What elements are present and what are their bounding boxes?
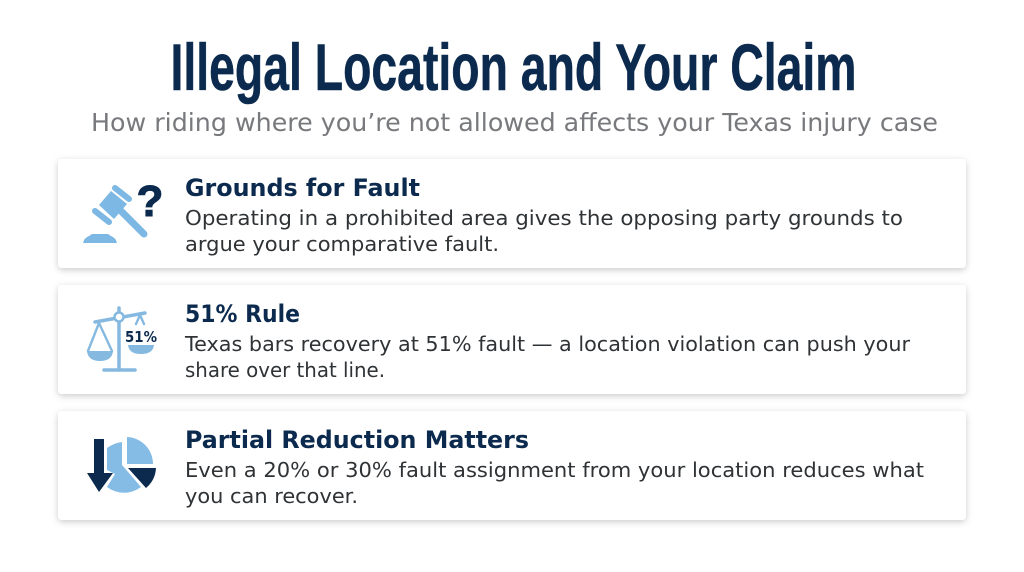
heading: Partial Reduction Matters	[185, 426, 529, 454]
subtitle: How riding where you’re not allowed affects your Texas injury case	[91, 108, 938, 137]
heading: 51% Rule	[185, 300, 300, 328]
body text	[185, 458, 924, 508]
body text	[184, 332, 911, 382]
icon: scales with 51%	[87, 308, 157, 370]
icon: gavel with question mark	[83, 177, 163, 243]
body text: argue your comparative fault.	[185, 232, 499, 256]
heading: Grounds for Fault	[185, 174, 420, 202]
body text: share over that line.	[185, 358, 385, 382]
panel: grounds for fault	[58, 159, 966, 268]
icon: down arrow and pie chart	[87, 437, 156, 493]
body text: Texas bars recovery at 51% fault — a location violation can push your	[184, 332, 911, 356]
panel: partial reduction matters	[58, 411, 966, 520]
body text: you can recover.	[185, 484, 358, 508]
question mark: ?	[136, 177, 163, 226]
body text	[185, 206, 903, 256]
body text: Even a 20% or 30% fault assignment from your location reduces what	[185, 458, 924, 482]
body text: Operating in a prohibited area gives the opposing party grounds to	[185, 206, 903, 230]
panel: 51% rule	[58, 285, 966, 394]
51% label: 51%	[125, 328, 157, 346]
